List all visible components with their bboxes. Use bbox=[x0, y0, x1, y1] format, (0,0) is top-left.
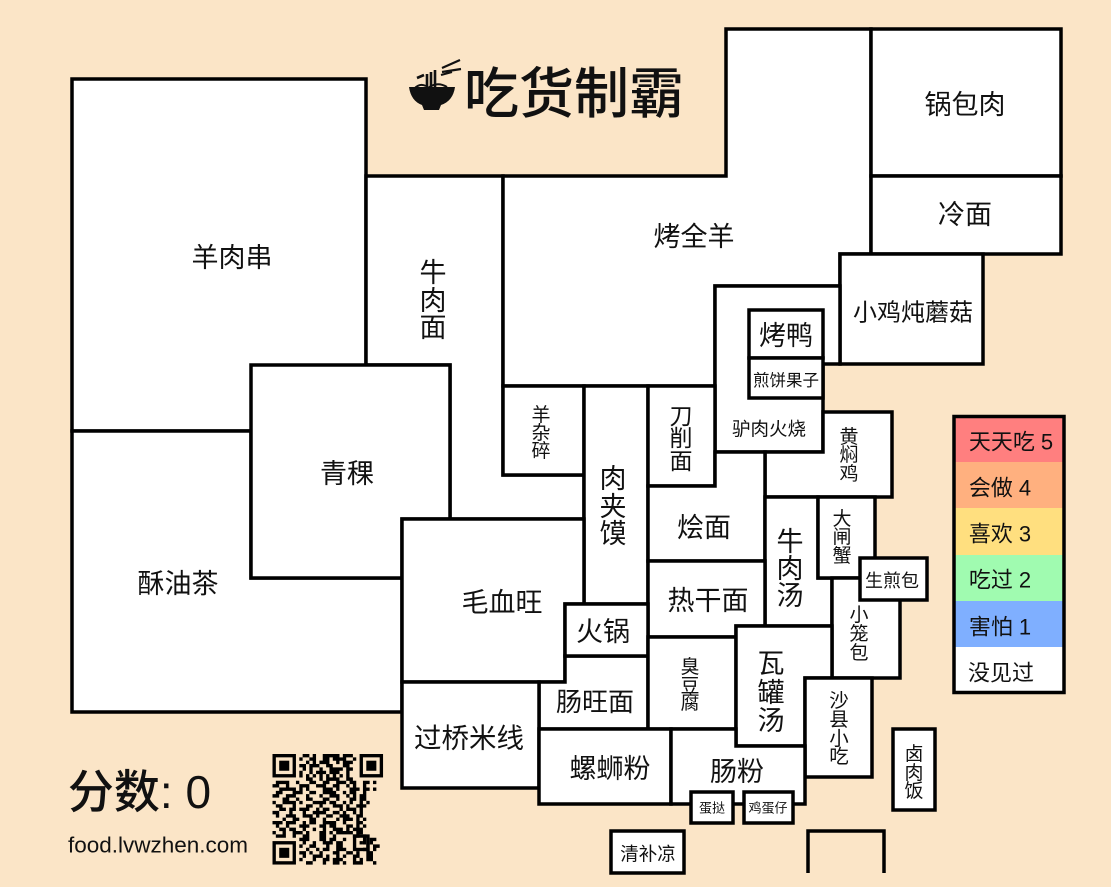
region: unfinished outline bbox=[808, 831, 884, 873]
region: 肠粉 bbox=[671, 729, 805, 804]
region: 牛肉汤 bbox=[765, 497, 832, 626]
region: 卤肉饭: 肉 bbox=[904, 762, 924, 784]
legend bbox=[954, 416, 1064, 692]
region: 生煎包: 生煎包 bbox=[865, 571, 919, 591]
legend: 没见过 bbox=[955, 647, 1063, 692]
region: 螺蛳粉 bbox=[539, 729, 671, 804]
region: 沙县小吃: 吃 bbox=[829, 746, 849, 768]
region: 牛肉汤: 汤 bbox=[776, 581, 804, 611]
region: 肉夹馍: 夹 bbox=[600, 492, 626, 522]
region: 臭豆腐: 臭 bbox=[680, 656, 700, 678]
region: 臭豆腐 bbox=[648, 637, 736, 729]
region: 清补凉: 清补凉 bbox=[620, 844, 676, 864]
region: 臭豆腐: 腐 bbox=[680, 692, 700, 714]
region: 沙县小吃: 沙 bbox=[829, 690, 849, 712]
region: 烤鸭: 烤鸭 bbox=[759, 321, 813, 351]
region: 羊杂碎 bbox=[503, 386, 584, 475]
region: 酥油茶: 酥油茶 bbox=[138, 569, 218, 599]
region: 毛血旺 bbox=[402, 519, 584, 682]
region: 卤肉饭: 卤 bbox=[904, 742, 924, 764]
legend: 害怕 1: 害怕 1 bbox=[969, 614, 1031, 640]
region: 牛肉面: 牛 bbox=[420, 258, 446, 288]
legend: 吃过 2 bbox=[955, 555, 1063, 601]
region: 肉夹馍: 肉 bbox=[600, 464, 626, 494]
legend: 害怕 1 bbox=[955, 601, 1063, 647]
website url: food.lvwzhen.com bbox=[68, 832, 248, 858]
region: 螺蛳粉: 螺蛳粉 bbox=[570, 754, 650, 784]
region: 生煎包 bbox=[860, 558, 927, 600]
region: 刀削面: 削 bbox=[670, 425, 692, 451]
region: 小笼包 bbox=[832, 578, 900, 678]
region: 羊肉串: 羊肉串 bbox=[192, 243, 272, 273]
region: 小笼包: 小 bbox=[849, 604, 869, 626]
score: 分数: 0 bbox=[68, 766, 211, 818]
region: 卤肉饭: 饭 bbox=[904, 780, 924, 802]
region: 黄焖鸡: 黄 bbox=[839, 426, 859, 448]
region: 黄焖鸡: 鸡 bbox=[839, 462, 859, 484]
region: 烩面 bbox=[648, 452, 765, 561]
region: 沙县小吃: 县 bbox=[829, 709, 849, 731]
region: 肠旺面: 肠旺面 bbox=[556, 687, 634, 717]
region: 肠粉: 肠粉 bbox=[710, 757, 764, 787]
region: 小鸡炖蘑菇: 小鸡炖蘑菇 bbox=[853, 300, 973, 326]
region: 刀削面 bbox=[648, 386, 715, 486]
legend: 吃过 2: 吃过 2 bbox=[969, 568, 1031, 592]
region: 驴肉火烧 bbox=[715, 286, 840, 452]
region: 黄焖鸡: 焖 bbox=[839, 444, 859, 466]
region: 毛血旺: 毛血旺 bbox=[462, 588, 542, 618]
region: 瓦罐汤: 罐 bbox=[758, 678, 784, 708]
region: 小鸡炖蘑菇 bbox=[840, 254, 983, 364]
region: 瓦罐汤 bbox=[736, 626, 832, 746]
region: 大闸蟹 bbox=[818, 497, 875, 578]
region: 羊杂碎: 碎 bbox=[531, 440, 551, 462]
region: 烤鸭 bbox=[749, 310, 823, 358]
region: 瓦罐汤: 瓦 bbox=[758, 649, 784, 679]
region: 清补凉 bbox=[611, 831, 684, 873]
region: 烤全羊: 烤全羊 bbox=[654, 222, 734, 252]
region: 瓦罐汤: 汤 bbox=[758, 706, 784, 736]
region: 大闸蟹: 闸 bbox=[832, 526, 852, 548]
legend: 喜欢 3: 喜欢 3 bbox=[969, 522, 1031, 546]
region: 煎饼果子 bbox=[749, 358, 823, 398]
region: 鸡蛋仔: 鸡蛋仔 bbox=[748, 800, 788, 816]
region: 热干面: 热干面 bbox=[668, 586, 748, 616]
region: 牛肉汤: 肉 bbox=[776, 554, 804, 584]
region: 过桥米线: 过桥米线 bbox=[414, 722, 524, 754]
legend: 天天吃 5: 天天吃 5 bbox=[969, 430, 1053, 454]
region: 冷面: 冷面 bbox=[938, 200, 992, 230]
icon: noodle bowl bbox=[409, 60, 461, 110]
region: 青稞 bbox=[251, 365, 450, 578]
region: 鸡蛋仔 bbox=[744, 792, 793, 823]
region: 酥油茶 bbox=[72, 431, 402, 712]
region: 锅包肉 bbox=[871, 29, 1061, 176]
region: 大闸蟹: 蟹 bbox=[832, 544, 852, 566]
region: 沙县小吃: 小 bbox=[829, 728, 849, 750]
region: 臭豆腐: 豆 bbox=[680, 676, 700, 696]
region: 冷面 bbox=[871, 176, 1061, 254]
region: 卤肉饭 bbox=[893, 729, 935, 810]
region: 黄焖鸡 bbox=[765, 412, 892, 497]
region: 蛋挞: 蛋挞 bbox=[699, 800, 725, 816]
region: 羊肉串 bbox=[72, 79, 366, 431]
region: 火锅: 火锅 bbox=[576, 617, 630, 647]
region: 牛肉面: 肉 bbox=[420, 286, 446, 316]
QR code bbox=[272, 756, 381, 863]
title: 吃货制霸 bbox=[464, 63, 684, 125]
region: 羊杂碎: 羊 bbox=[531, 404, 551, 426]
region: 小笼包: 笼 bbox=[849, 622, 869, 644]
region: 牛肉汤: 牛 bbox=[776, 527, 804, 557]
legend: 没见过: 没见过 bbox=[968, 660, 1034, 686]
region: 肉夹馍 bbox=[584, 386, 648, 604]
legend: 会做 4 bbox=[955, 462, 1063, 508]
region: 牛肉面: 面 bbox=[420, 313, 446, 343]
region: 青稞: 青稞 bbox=[320, 459, 374, 489]
region: 牛肉面 bbox=[366, 176, 584, 519]
region: 锅包肉: 锅包肉 bbox=[924, 90, 1006, 120]
region: 烩面: 烩面 bbox=[677, 513, 731, 543]
region: 大闸蟹: 大 bbox=[832, 508, 852, 530]
region: 刀削面: 面 bbox=[670, 448, 692, 474]
region: 火锅 bbox=[565, 604, 648, 656]
region: 热干面 bbox=[648, 561, 765, 637]
legend: 天天吃 5 bbox=[955, 418, 1063, 462]
region: 刀削面: 刀 bbox=[670, 403, 692, 429]
legend: 喜欢 3 bbox=[955, 508, 1063, 555]
region: 过桥米线 bbox=[402, 682, 539, 788]
region: 蛋挞 bbox=[691, 792, 733, 823]
region: 煎饼果子: 煎饼果子 bbox=[753, 371, 819, 390]
region: 烤全羊 bbox=[503, 29, 871, 386]
region: 小笼包: 包 bbox=[849, 642, 869, 664]
region: 羊杂碎: 杂 bbox=[531, 422, 551, 444]
region: 沙县小吃 bbox=[805, 678, 872, 777]
region: 肠旺面 bbox=[539, 656, 648, 729]
region: 肉夹馍: 馍 bbox=[600, 519, 626, 549]
legend: 会做 4: 会做 4 bbox=[969, 476, 1031, 500]
region: 驴肉火烧: 驴肉火烧 bbox=[732, 418, 806, 440]
